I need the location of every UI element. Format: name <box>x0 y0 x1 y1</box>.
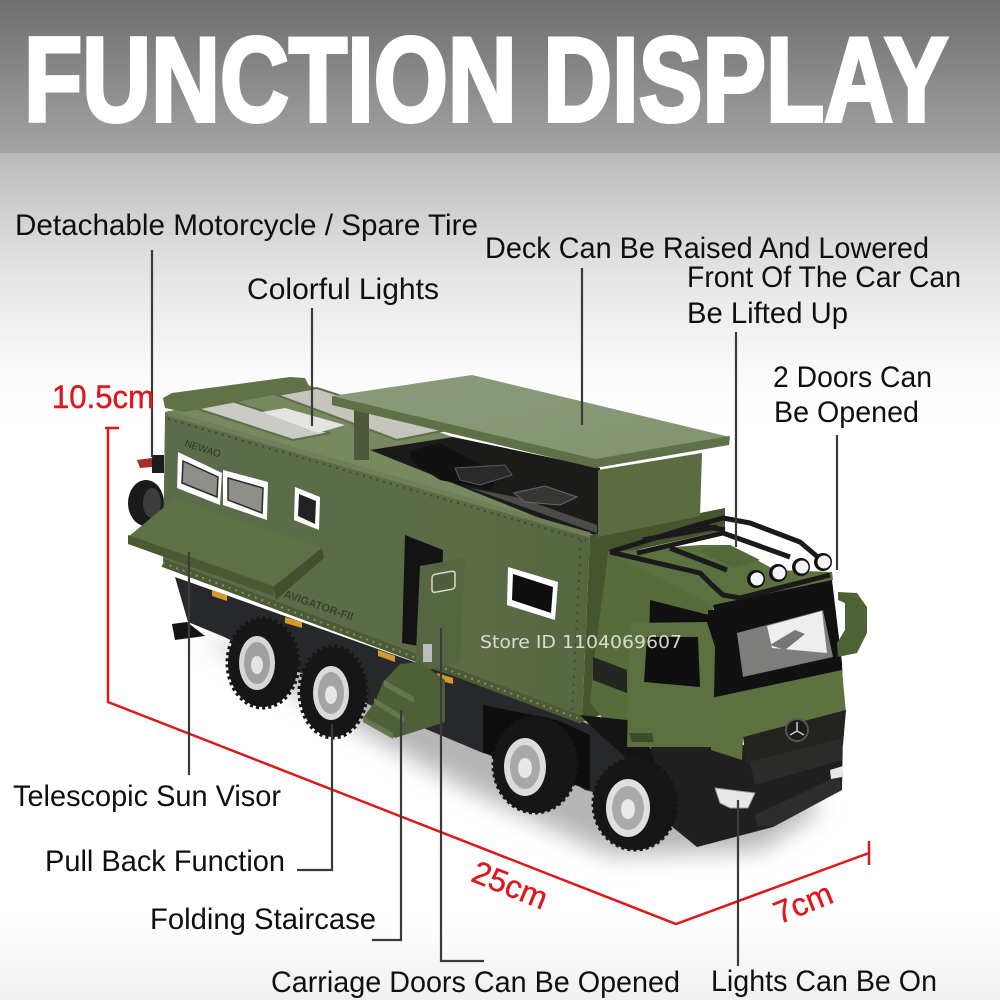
front corner rivets <box>572 540 581 715</box>
windshield frame <box>713 580 843 705</box>
wheel arch <box>483 705 590 790</box>
leader line <box>581 268 583 425</box>
callout: 2 doors: 2 Doors Can <box>773 361 932 394</box>
callout: colorful lights: Colorful Lights <box>247 273 439 306</box>
small window <box>294 487 320 530</box>
deck edge <box>332 396 730 468</box>
roof vent <box>697 545 760 568</box>
open cab door <box>627 622 715 747</box>
cab side window <box>593 657 627 693</box>
deck support post <box>354 408 369 460</box>
cab lower arch <box>580 715 680 830</box>
rear windows <box>177 452 268 520</box>
windshield glass <box>737 610 833 677</box>
brand mark: NEWAO <box>183 438 222 460</box>
leader line <box>836 435 838 570</box>
width end tick <box>868 841 870 865</box>
title band <box>0 0 1000 153</box>
right headlight <box>830 766 843 779</box>
model mark: AVIGATOR-FII <box>282 588 355 624</box>
lower bumper <box>650 730 843 847</box>
rear wheel 1 <box>228 619 298 707</box>
title: FUNCTION DISPLAY <box>24 13 948 146</box>
top rivet rail <box>167 413 590 535</box>
leader line <box>151 250 153 457</box>
leader line <box>735 332 737 547</box>
orange markers <box>212 590 453 684</box>
cab side <box>590 552 715 747</box>
kickstand <box>172 622 205 640</box>
solar panels <box>195 388 447 440</box>
grille <box>743 710 846 765</box>
deck top <box>332 375 730 460</box>
roof rail <box>163 377 310 412</box>
callout: deck: Deck Can Be Raised And Lowered <box>485 232 929 265</box>
height dimension <box>105 427 119 429</box>
callout: folding staircase <box>150 710 401 940</box>
rear wheel 2 <box>300 647 366 737</box>
callout: telescopic sun visor: Telescopic Sun Visor <box>13 780 281 813</box>
roof rack <box>610 518 830 598</box>
leader line <box>188 552 190 775</box>
folding staircase <box>363 662 445 739</box>
side mirror <box>837 592 867 657</box>
left headlight <box>715 788 755 808</box>
callout: folding staircase: Folding Staircase <box>150 903 376 936</box>
roof light bar <box>747 553 832 588</box>
ground shadow <box>205 640 820 855</box>
large side window <box>507 567 558 620</box>
lower grille slats <box>750 738 842 785</box>
leader line <box>441 628 484 961</box>
leader line <box>311 308 313 426</box>
chassis <box>175 577 640 800</box>
carriage door opening <box>402 535 443 650</box>
width label: 7cm <box>768 875 838 931</box>
truck <box>128 375 867 850</box>
mercedes badge <box>786 719 808 741</box>
carriage door <box>415 558 465 673</box>
front wheel 2 <box>593 758 677 850</box>
callout: lights: Lights Can Be On <box>711 965 937 998</box>
cab roof <box>608 545 833 605</box>
dimension lines <box>105 428 869 924</box>
callout: 2 doors <box>773 361 932 570</box>
box side <box>163 412 590 722</box>
callout: pull back <box>45 724 332 878</box>
callout: front of car: Be Lifted Up <box>687 297 848 330</box>
motorcycle at rear <box>128 455 164 526</box>
raised deck <box>332 375 730 537</box>
callout: 2 doors: Be Opened <box>774 396 919 429</box>
cab opening <box>648 600 713 700</box>
leader line <box>737 800 739 966</box>
callout: carriage doors: Carriage Doors Can Be Opened <box>271 966 680 999</box>
interior pit <box>370 437 600 535</box>
watermark: Store ID 1104069607 <box>480 632 682 653</box>
cab pillar <box>708 610 735 706</box>
bumper step <box>755 775 841 827</box>
height label: 10.5cm <box>52 379 154 415</box>
callout: front of car: Front Of The Car Can <box>687 261 961 294</box>
cab front lower panel <box>711 670 846 760</box>
callout: carriage doors <box>271 628 680 999</box>
callout: detachable motorcycle: Detachable Motorcycle / Spare Tire <box>15 209 478 242</box>
bottom rivets <box>163 563 582 720</box>
roof surface <box>165 382 600 536</box>
length label: 25cm <box>467 854 553 916</box>
box front face <box>582 508 725 722</box>
callout: pull back: Pull Back Function <box>45 845 285 878</box>
top rivets <box>168 419 588 541</box>
leader line <box>372 710 401 940</box>
sun visor awning <box>128 498 324 600</box>
deck front wall <box>598 453 702 537</box>
length and width dimension <box>108 428 869 924</box>
callout: front of car <box>687 261 961 547</box>
front wheel 1 <box>493 717 577 813</box>
leader line <box>297 724 332 870</box>
